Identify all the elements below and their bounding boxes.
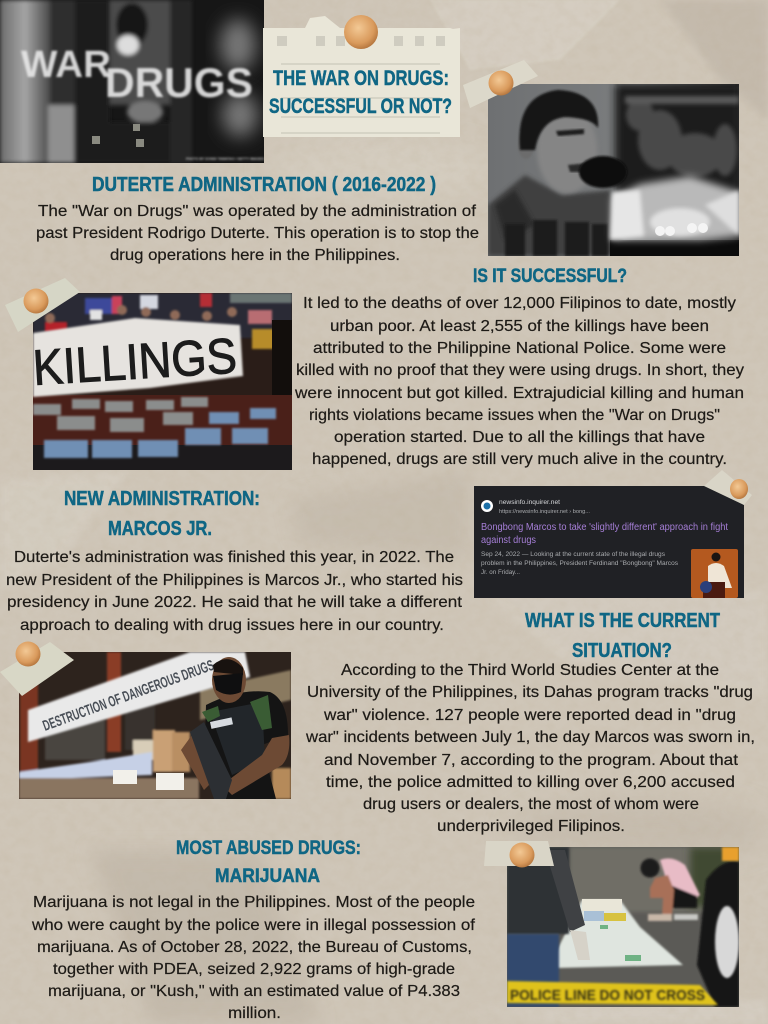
heading: most abused drugs: MARIJUANA bbox=[215, 866, 320, 887]
heading: current situation: WHAT IS THE CURRENT bbox=[525, 610, 720, 632]
icon: tape and pin, destruction photo bbox=[0, 642, 74, 696]
search result card bbox=[474, 486, 744, 598]
text block: is it successful: happened, drugs are still very much alive in the country. bbox=[312, 451, 727, 468]
text block: most abused drugs bbox=[31, 894, 476, 1022]
text block: current situation: underprivileged Filipinos. bbox=[437, 818, 625, 835]
text block: current situation: time, the police admitted to killing over 6,200 accused bbox=[326, 774, 735, 791]
thumbnail: Marcos at podium bbox=[691, 549, 738, 598]
icon: title pin bbox=[344, 15, 378, 49]
text block: new administration: approach to dealing with drug issues here in our country. bbox=[20, 617, 444, 634]
title: SUCCESSFUL OR NOT? bbox=[269, 95, 452, 118]
search result card: Bongbong Marcos to take 'slightly different' approach in fight bbox=[481, 522, 728, 533]
heading: current situation bbox=[525, 610, 720, 662]
heading: new administration: MARCOS JR. bbox=[108, 518, 212, 540]
title note card bbox=[263, 16, 460, 137]
photo title text: PHOTO BY DONDI TAWATAO / GETTY IMAGES bbox=[186, 156, 264, 161]
heading: most abused drugs bbox=[176, 838, 361, 887]
text block: current situation: According to the Third World Studies Center at the bbox=[341, 662, 719, 679]
photo: war on drugs title image bbox=[0, 0, 264, 163]
photo title text: DRUGS bbox=[105, 59, 253, 106]
text block: current situation bbox=[305, 662, 755, 835]
text block: most abused drugs: who were caught by the police were in illegal possession of bbox=[31, 917, 476, 934]
text block: is it successful: killed with no proof that they were using drugs. In short, they bbox=[296, 362, 744, 379]
photo title text: WAR bbox=[21, 44, 111, 86]
heading: is it successful: IS IT SUCCESSFUL? bbox=[473, 266, 627, 287]
icon: tape and pin, killings photo bbox=[5, 278, 80, 332]
text block: is it successful: rights violations became issues when the "War on Drugs" bbox=[309, 407, 720, 424]
tape text: POLICE LINE DO NOT CROSS bbox=[510, 987, 705, 1004]
heading: most abused drugs: MOST ABUSED DRUGS: bbox=[176, 838, 361, 859]
text block: is it successful: were innocent but got killed. Extrajudicial killing and human bbox=[294, 385, 744, 402]
text block: is it successful: urban poor. At least 2,555 of the killings have been bbox=[330, 318, 709, 335]
heading: Duterte administration: DUTERTE ADMINISTRATION ( 2016-2022 ) bbox=[92, 174, 436, 196]
text block: Duterte administration: past President Rodrigo Duterte. This operation is to stop the bbox=[36, 225, 479, 242]
text block: new administration: Duterte's administration was finished this year, in 2022. The bbox=[14, 549, 454, 566]
icon: tape and pin, seized drugs photo bbox=[484, 841, 554, 868]
text block: is it successful: It led to the deaths of over 12,000 Filipinos to date, mostly bbox=[303, 295, 736, 312]
text block: is it successful bbox=[294, 295, 744, 468]
search result card: newsinfo.inquirer.net bbox=[499, 499, 560, 506]
text block: most abused drugs: million. bbox=[228, 1005, 281, 1022]
text block: new administration bbox=[6, 549, 463, 634]
search result card: https://newsinfo.inquirer.net › bong... bbox=[499, 509, 590, 515]
heading: new administration: NEW ADMINISTRATION: bbox=[64, 488, 260, 510]
text block: most abused drugs: together with PDEA, seized 2,922 grams of high-grade bbox=[53, 961, 455, 978]
icon: tape and pin, Duterte photo bbox=[463, 60, 538, 108]
text block: is it successful: operation started. Due to all the killings that have bbox=[334, 429, 705, 446]
text block: most abused drugs: Marijuana is not legal in the Philippines. Most of the people bbox=[33, 894, 475, 911]
photo title text bbox=[21, 44, 264, 161]
heading: new administration bbox=[64, 488, 260, 540]
search result card: against drugs bbox=[481, 535, 536, 546]
text block: current situation: University of the Philippines, its Dahas program tracks "drug bbox=[307, 684, 753, 701]
heading: current situation: SITUATION? bbox=[572, 640, 672, 662]
text block: Duterte administration bbox=[36, 203, 479, 264]
text block: most abused drugs: marijuana, or "Kush," with an estimated value of P4.383 bbox=[48, 983, 460, 1000]
text block: Duterte administration: drug operations here in the Philippines. bbox=[110, 247, 400, 264]
text block: is it successful: attributed to the Philippine National Police. Some were bbox=[313, 340, 726, 357]
text block: new administration: new President of the Philippines is Marcos Jr., who started his bbox=[6, 572, 463, 589]
search result card: Jr. on Friday... bbox=[481, 569, 520, 576]
search result card: Sep 24, 2022 — Looking at the current state of the illegal drugs bbox=[481, 551, 666, 558]
text block: current situation: war" incidents between July 1, the day Marcos was sworn in, bbox=[305, 729, 755, 746]
search result card: problem in the Philippines, President Ferdinand "Bongbong" Marcos bbox=[481, 560, 679, 567]
banner text: KILLINGS bbox=[31, 328, 238, 396]
banner text: DESTRUCTION OF DANGEROUS DRUGS bbox=[41, 657, 216, 735]
photo: Duterte collage bbox=[488, 84, 739, 256]
text block: current situation: drug users or dealers, the most of whom were bbox=[363, 796, 699, 813]
photo: destruction of dangerous drugs bbox=[19, 652, 291, 799]
title: THE WAR ON DRUGS: bbox=[273, 67, 449, 90]
text block: current situation: and November 7, according to the program. About that bbox=[324, 752, 739, 769]
icon: tape and pin, search card bbox=[704, 470, 752, 505]
title bbox=[269, 67, 452, 118]
text block: most abused drugs: marijuana. As of October 28, 2022, the Bureau of Customs, bbox=[37, 939, 472, 956]
text block: new administration: presidency in June 2022. He said that he will take a different bbox=[7, 594, 463, 611]
photo: seized drugs and police line bbox=[507, 847, 739, 1007]
text block: Duterte administration: The "War on Drugs" was operated by the administration of bbox=[38, 203, 477, 220]
photo: killings protest bbox=[31, 293, 292, 470]
text block: current situation: war" violence. 127 people were reported dead in "drug bbox=[323, 707, 736, 724]
